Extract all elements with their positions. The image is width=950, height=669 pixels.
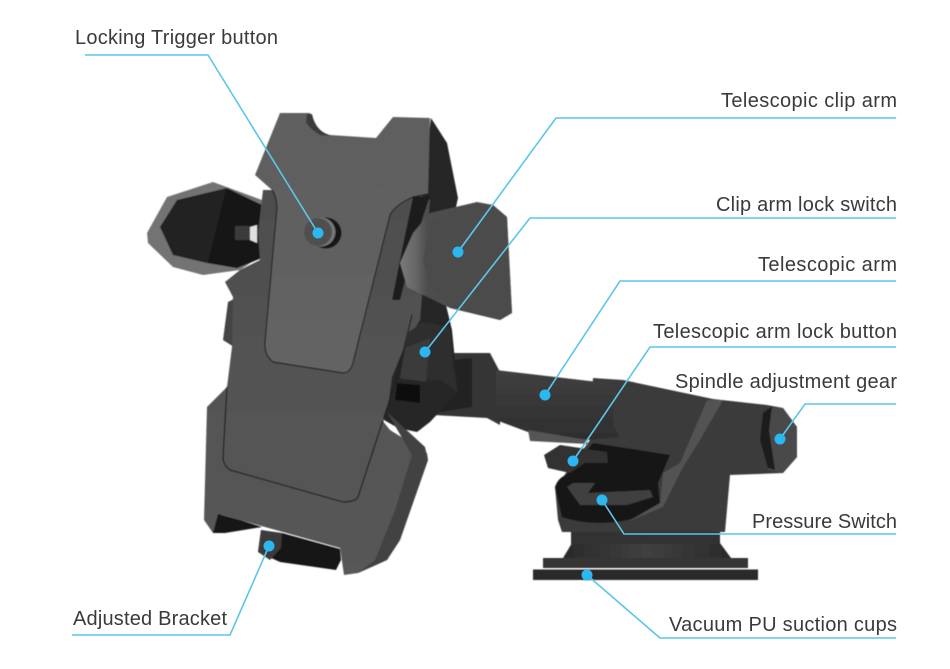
left clip arm <box>147 182 262 275</box>
callout: Telescopic clip arm: Telescopic clip arm <box>721 90 897 112</box>
suction base <box>533 531 758 580</box>
spindle gear <box>768 407 797 473</box>
callout: Telescopic arm lock button: Telescopic arm lock button <box>653 321 897 343</box>
dark connector <box>395 383 420 403</box>
light edge band <box>627 400 723 522</box>
locking trigger button <box>304 218 342 248</box>
plate notch shading <box>306 114 330 136</box>
callout: Telescopic arm lock button <box>568 321 897 466</box>
callout: Locking Trigger button <box>75 27 324 238</box>
callout: Vacuum PU suction cups: Vacuum PU suction cups <box>669 614 897 636</box>
housing <box>555 378 797 532</box>
callout: Spindle adjustment gear: Spindle adjustment gear <box>675 371 897 393</box>
pressure switch lever <box>567 483 653 505</box>
groove wedge <box>392 196 430 300</box>
small side tab <box>223 299 234 347</box>
product: phone mount <box>147 113 797 580</box>
right dark side of holder <box>384 118 458 432</box>
callout: Clip arm lock switch: Clip arm lock switch <box>716 194 897 216</box>
callout: Adjusted Bracket <box>72 540 274 635</box>
callout: Clip arm lock switch <box>420 194 897 358</box>
callout: Locking Trigger button: Locking Trigger button <box>75 27 278 49</box>
callout: Vacuum PU suction cups <box>582 570 897 638</box>
callout: Telescopic clip arm <box>452 90 897 258</box>
callout: Pressure Switch: Pressure Switch <box>752 511 897 533</box>
callout: Adjusted Bracket: Adjusted Bracket <box>73 608 227 630</box>
callout: Pressure Switch <box>596 494 897 534</box>
body side shade <box>358 412 428 573</box>
callout: Telescopic arm <box>540 254 897 400</box>
callout: Spindle adjustment gear <box>675 371 897 444</box>
front plate <box>255 113 430 373</box>
clip arm lock switch <box>400 322 458 392</box>
arm socket <box>400 353 500 430</box>
holder body <box>204 190 430 575</box>
lower panel groove <box>223 315 412 502</box>
telescopic arm and housing <box>400 353 797 532</box>
arm lock knob <box>544 445 608 473</box>
adjusted bracket <box>258 530 341 570</box>
right clip arm <box>400 202 512 320</box>
telescopic arm <box>496 370 620 440</box>
housing opening <box>555 443 670 523</box>
callout: Telescopic arm: Telescopic arm <box>758 254 897 276</box>
